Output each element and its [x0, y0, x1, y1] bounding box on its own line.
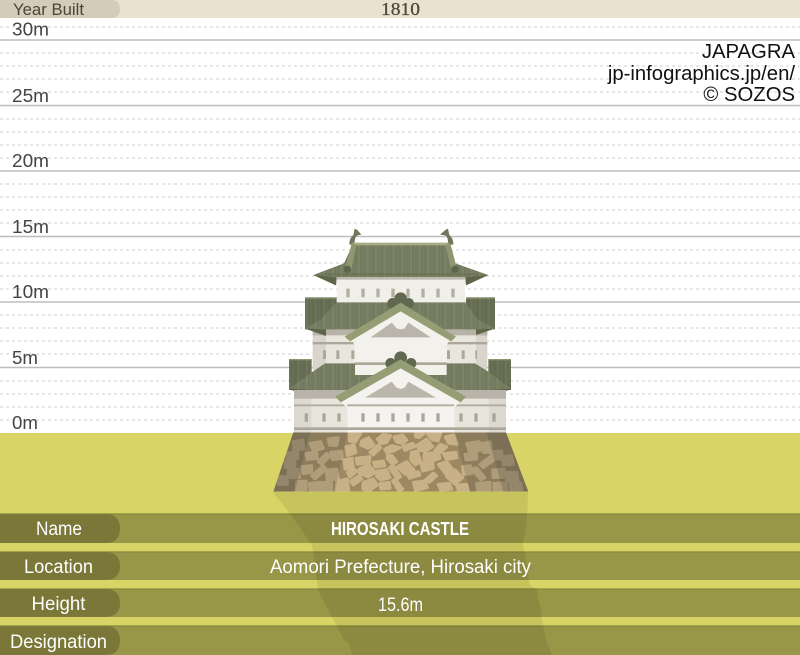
- height axis labels: 30m: [12, 20, 49, 40]
- row labels: Height: [32, 594, 86, 615]
- row values: 15.6m: [378, 595, 423, 616]
- height axis labels: [12, 20, 49, 433]
- middle roof: [305, 297, 337, 329]
- ground: [0, 433, 800, 655]
- height axis labels: 25m: [12, 86, 49, 106]
- top roof: [313, 243, 488, 285]
- year built label: Year Built: [13, 0, 84, 19]
- height axis labels: 15m: [12, 217, 49, 237]
- height axis labels: 5m: [12, 348, 38, 368]
- stones: [278, 434, 522, 492]
- height axis labels: 10m: [12, 282, 49, 302]
- row labels: Name: [36, 519, 82, 540]
- middle wall: [313, 328, 487, 370]
- height scale grid: [0, 27, 800, 420]
- lower wall: [294, 390, 506, 433]
- row labels: Designation: [10, 632, 107, 653]
- top tier: [313, 229, 488, 303]
- row labels: Location: [24, 557, 93, 578]
- height axis labels: 20m: [12, 151, 49, 171]
- row values: Aomori Prefecture, Hirosaki city: [270, 557, 531, 578]
- stone shading: [295, 432, 347, 492]
- height axis labels: 0m: [12, 413, 38, 433]
- middle crest: [387, 292, 414, 309]
- top wall: [337, 277, 465, 303]
- row values: HIROSAKI CASTLE: [331, 519, 469, 539]
- credit text: jp-infographics.jp/en/: [607, 63, 795, 85]
- year built row: [0, 0, 800, 19]
- middle windows: [323, 350, 477, 359]
- row labels: [10, 519, 107, 653]
- lower crest: [385, 351, 416, 369]
- middle gable: [351, 307, 450, 345]
- stone base: [270, 432, 530, 492]
- lower gable: [341, 367, 460, 408]
- lower windows: [305, 413, 496, 422]
- top windows: [346, 289, 455, 297]
- label pills: [0, 514, 120, 655]
- lower roof: [289, 359, 312, 390]
- credit text: JAPAGRA: [702, 41, 795, 63]
- roof ornaments: [349, 229, 453, 245]
- information rows: [0, 514, 800, 655]
- row values: [270, 519, 531, 616]
- credit text: [607, 41, 795, 106]
- castle illustration: [270, 229, 530, 492]
- upper-tier front block: [355, 345, 447, 375]
- year built label pill: [0, 0, 120, 18]
- credit text: © SOZOS: [703, 84, 795, 106]
- lower tier: [270, 345, 530, 492]
- castle shadow: [273, 492, 552, 655]
- middle tier: [305, 292, 495, 370]
